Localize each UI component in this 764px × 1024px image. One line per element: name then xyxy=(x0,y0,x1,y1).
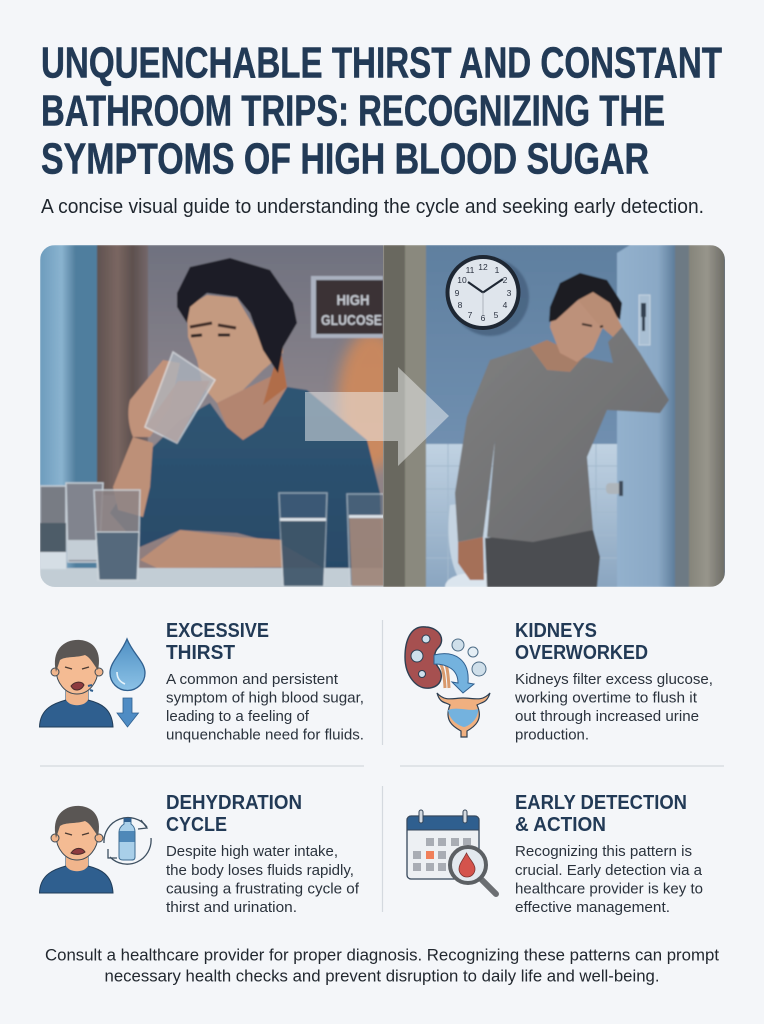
text: early detection description: effective management. xyxy=(515,899,670,916)
icon: thirsty person with water drop xyxy=(40,639,145,727)
heading: dehydration cycle xyxy=(166,791,302,836)
panel: dehydration cycle xyxy=(40,791,360,916)
heading: kidneys overworked: KIDNEYS xyxy=(515,619,597,642)
heading: kidneys overworked: OVERWORKED xyxy=(515,641,648,664)
text: early detection description xyxy=(515,843,703,916)
footer note xyxy=(45,946,719,986)
subtitle: A concise visual guide to understanding the cycle and seeking early detection. xyxy=(41,196,704,218)
icon: wall clock: 12 xyxy=(478,262,488,272)
icon: wall clock: 11 xyxy=(466,265,475,275)
heading: dehydration cycle: CYCLE xyxy=(166,813,227,836)
arrow between scenes xyxy=(305,367,449,466)
text: kidneys description: production. xyxy=(515,726,589,744)
icon: wall clock: 9 xyxy=(455,288,460,298)
text: dehydration description xyxy=(166,843,360,916)
scene: man at bathroom door xyxy=(383,245,728,587)
icon: wall clock: 7 xyxy=(468,310,473,320)
footer note: necessary health checks and prevent disruption to daily life and well-being. xyxy=(104,968,660,986)
text: kidneys description: out through increased urine xyxy=(515,708,699,725)
heading: excessive thirst: EXCESSIVE xyxy=(166,619,269,642)
heading: early detection and action xyxy=(515,791,687,836)
footer note: Consult a healthcare provider for proper diagnosis. Recognizing these patterns can prompt xyxy=(45,946,719,964)
text: early detection description: Recognizing this pattern is xyxy=(515,843,692,860)
scene: man drinking water xyxy=(40,245,406,588)
icon: dehydrated person with bottle cycle xyxy=(40,806,151,893)
text: excessive thirst description: leading to a feeling of xyxy=(166,708,310,725)
heading: excessive thirst xyxy=(166,619,269,664)
text: excessive thirst description xyxy=(166,671,364,744)
scene: man drinking water: HIGH xyxy=(336,292,370,309)
panel: excessive thirst xyxy=(40,619,364,744)
text: early detection description: crucial. Early detection via a xyxy=(515,862,703,879)
text: excessive thirst description: unquenchable need for fluids. xyxy=(166,726,364,744)
icon: wall clock: 8 xyxy=(458,300,463,310)
icon: wall clock: 3 xyxy=(507,288,512,298)
text: kidneys description: Kidneys filter excess glucose, xyxy=(515,671,713,688)
panel: early detection and action xyxy=(407,791,703,916)
heading: kidneys overworked xyxy=(515,619,648,664)
text: excessive thirst description: symptom of high blood sugar, xyxy=(166,690,364,706)
icon: calendar with magnifier xyxy=(407,810,496,894)
heading: early detection and action: & ACTION xyxy=(515,813,606,836)
text: excessive thirst description: A common and persistent xyxy=(166,671,339,688)
icon: wall clock xyxy=(446,255,520,330)
heading: early detection and action: EARLY DETECTION xyxy=(515,791,687,814)
text: kidneys description xyxy=(514,671,713,744)
text: dehydration description: Despite high water intake, xyxy=(166,843,338,860)
icon: wall clock: 10 xyxy=(457,275,467,285)
panel: kidneys overworked xyxy=(405,619,713,744)
heading: dehydration cycle: DEHYDRATION xyxy=(166,791,302,814)
text: kidneys description: working overtime to flush it xyxy=(514,690,698,706)
heading: excessive thirst: THIRST xyxy=(166,641,235,664)
icon: wall clock: 4 xyxy=(503,300,508,310)
text: dehydration description: causing a frustrating cycle of xyxy=(166,880,360,898)
text: dehydration description: the body loses fluids rapidly, xyxy=(166,862,354,879)
icon: kidney and bladder xyxy=(405,627,490,737)
title xyxy=(41,38,722,184)
icon: wall clock: 1 xyxy=(495,265,500,275)
scene: man drinking water: GLUCOSE xyxy=(321,312,382,329)
icon: wall clock: 2 xyxy=(503,275,508,285)
icon: wall clock: 6 xyxy=(481,313,486,323)
text: dehydration description: thirst and urination. xyxy=(166,899,297,916)
photo panel: thirst to bathroom scenes xyxy=(40,245,728,588)
icon: wall clock: 5 xyxy=(494,310,499,320)
text: early detection description: healthcare provider is key to xyxy=(515,880,703,898)
